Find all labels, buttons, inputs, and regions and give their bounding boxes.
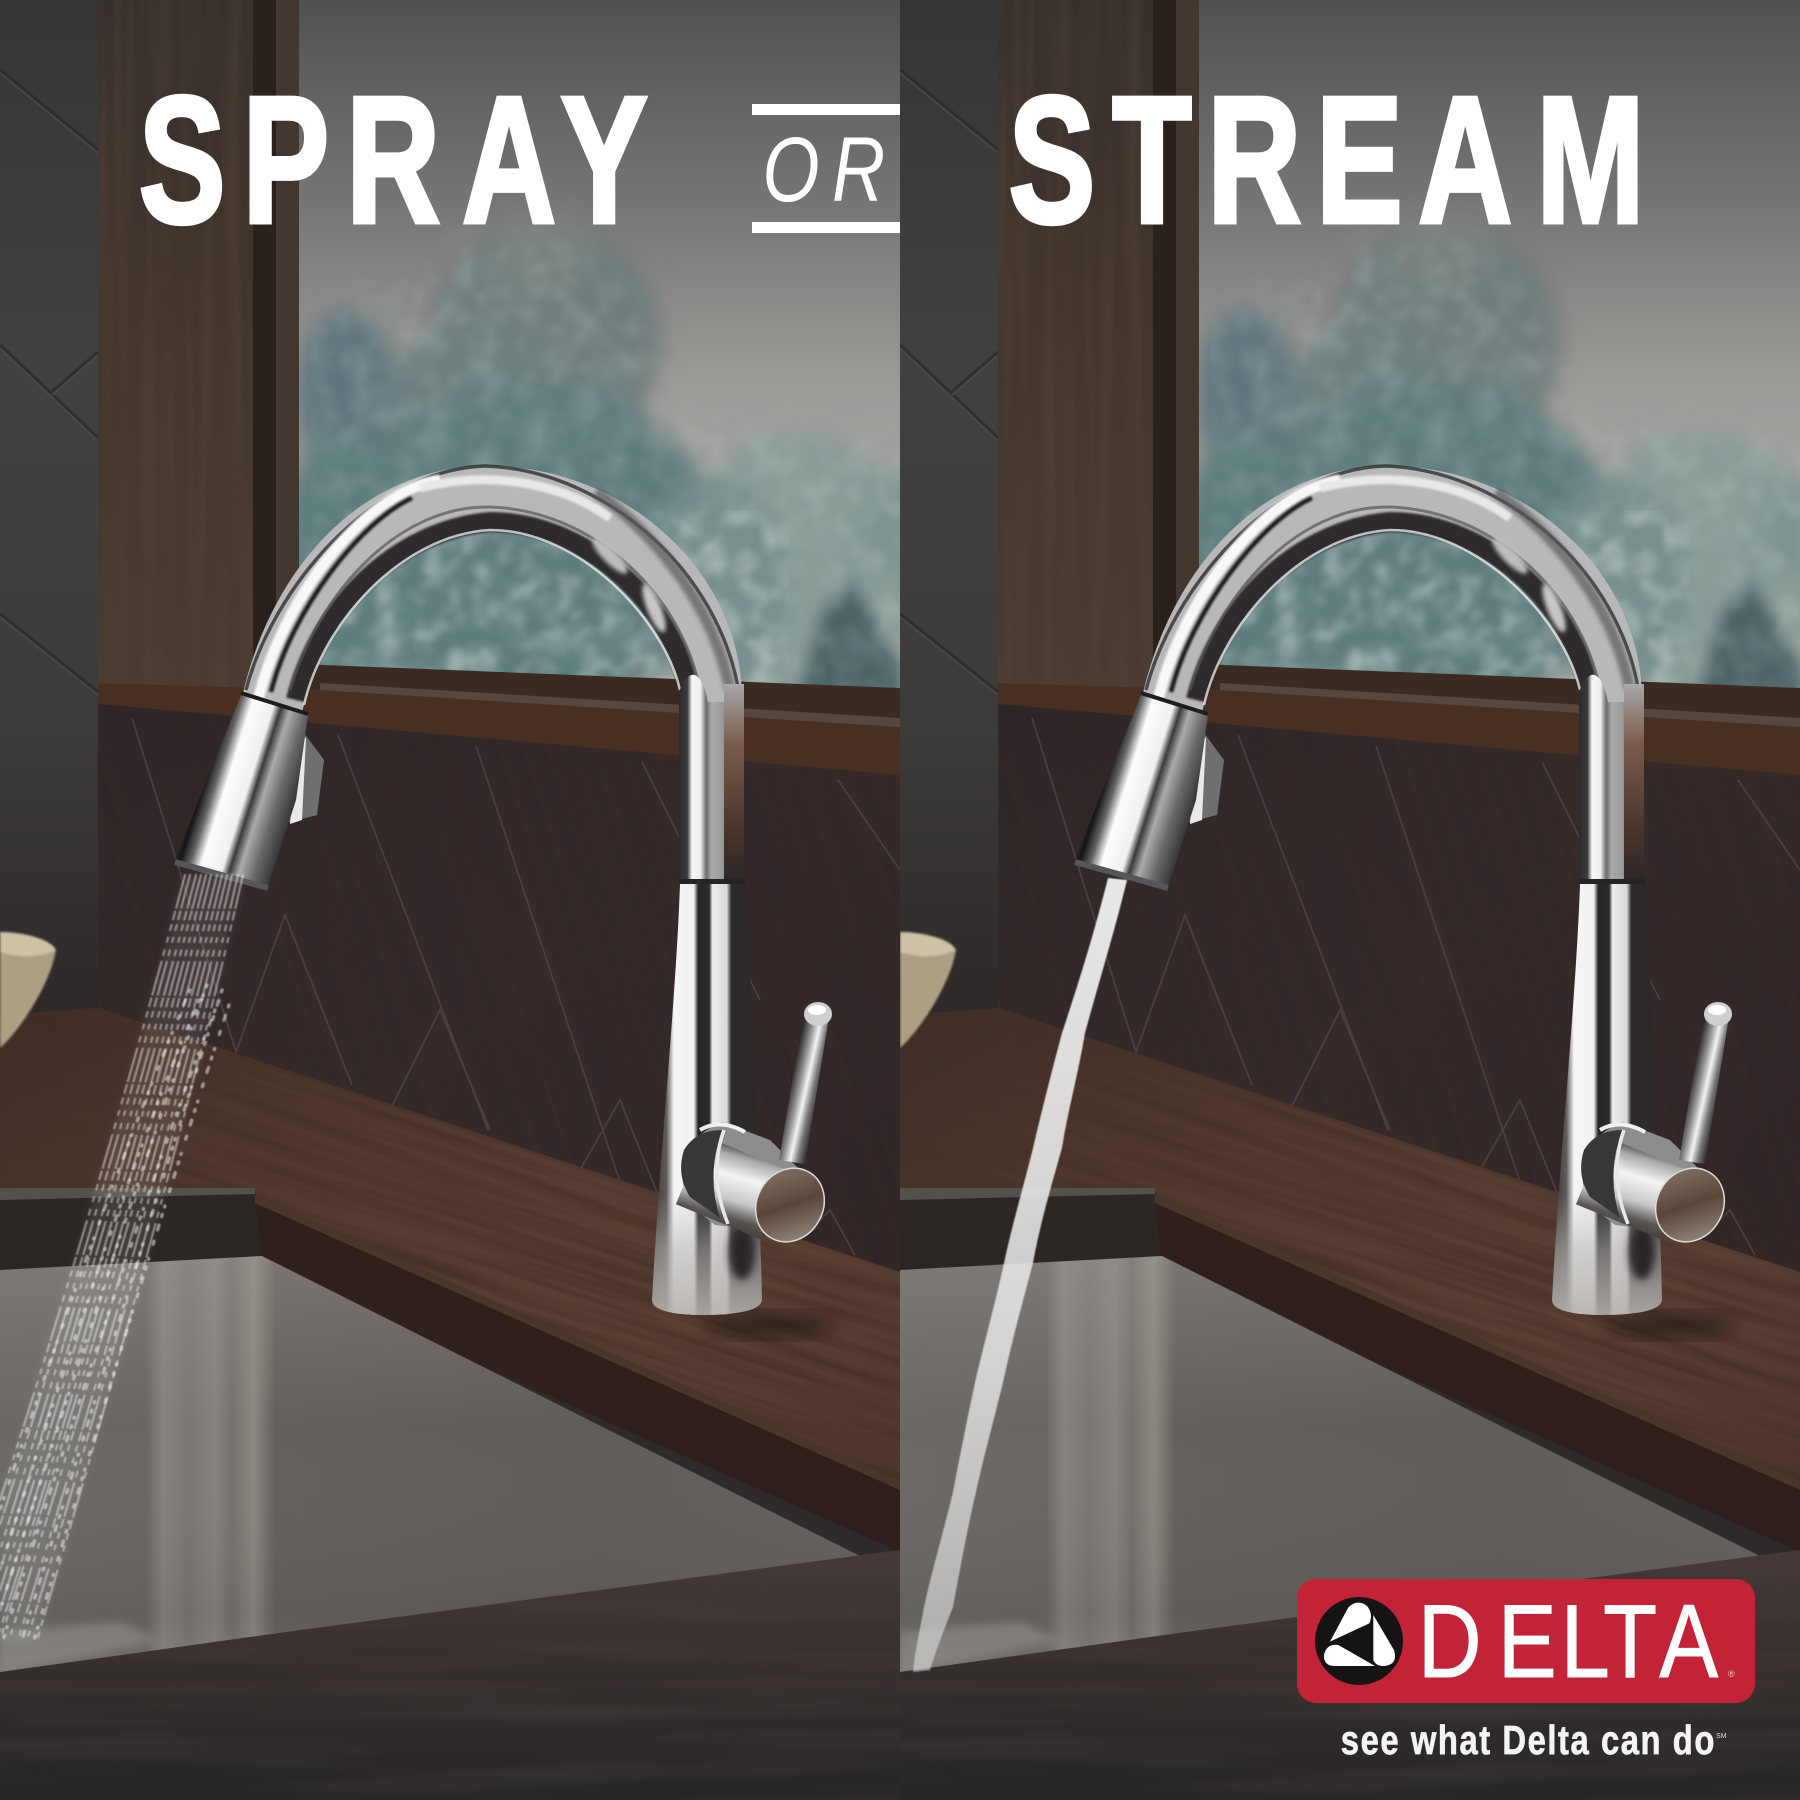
icon: Delta triangle mark (1315, 1597, 1403, 1685)
faucet right (1074, 466, 1738, 1315)
registered mark: ® (1728, 1669, 1735, 1679)
spray water (0, 875, 243, 1640)
panel: spray kitchen scene (0, 0, 900, 1718)
panel: stream kitchen scene (819, 0, 1800, 1800)
tagline: SM (1716, 1733, 1727, 1740)
kitchen background left (0, 0, 1055, 1800)
tagline: see what Delta can do (1341, 1716, 1714, 1763)
title: STREAM: STREAM (1009, 60, 1644, 261)
title: SPRAY: SPRAY (139, 60, 647, 261)
logo: Delta badge (1297, 1579, 1755, 1703)
divider label: OR: OR (762, 118, 885, 221)
logo wordmark: DELTA (1418, 1584, 1719, 1700)
divider label: OR (752, 104, 900, 233)
stream water (913, 878, 1127, 1672)
kitchen background right (819, 0, 1800, 1800)
faucet left (174, 466, 838, 1315)
